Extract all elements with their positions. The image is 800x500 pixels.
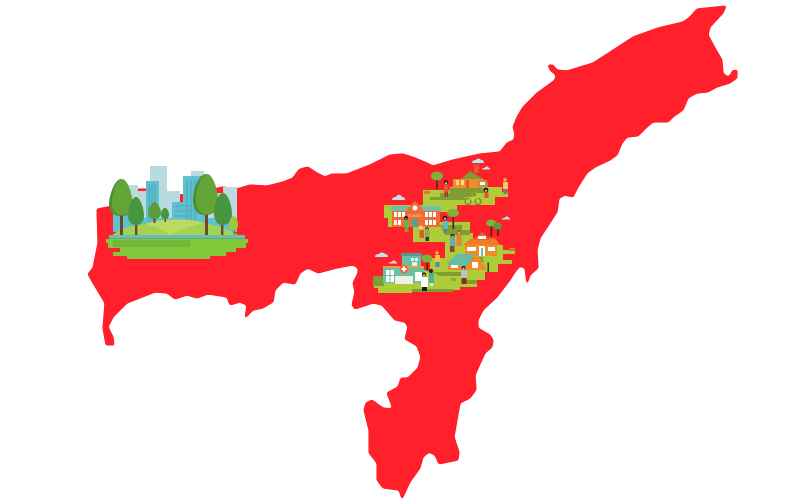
school building: SCHOOL: [408, 214, 422, 218]
person 10: [435, 250, 440, 267]
school building: [391, 201, 441, 227]
person 12: [421, 272, 428, 291]
person 2: [503, 178, 508, 194]
grass strips: [106, 239, 248, 259]
person 4: [404, 216, 409, 232]
house: top right: [452, 164, 488, 188]
hospital building: [383, 253, 424, 284]
illustration: city park: [106, 166, 248, 259]
bicycle: [465, 197, 481, 204]
person 1: [444, 180, 448, 197]
house: middle right: [463, 232, 500, 256]
hills: [111, 219, 240, 236]
village trees: [422, 172, 502, 272]
person 13: [429, 269, 434, 286]
village grass patches: [373, 187, 515, 293]
house: lower middle: [447, 254, 486, 270]
map: red region silhouette: [88, 6, 737, 499]
flowers: [424, 191, 515, 281]
person 9: [456, 230, 462, 246]
people: [404, 178, 508, 291]
river band: [109, 235, 245, 240]
person 6: [425, 227, 430, 241]
person 7: [443, 216, 448, 233]
clouds: [375, 158, 510, 264]
person 8: [450, 234, 455, 252]
city skyline buildings: [113, 166, 237, 232]
person 3: [484, 188, 488, 205]
person 11: [461, 266, 467, 284]
illustration: village scene: [373, 158, 515, 293]
person 5: [419, 225, 424, 238]
trees: [109, 174, 238, 235]
